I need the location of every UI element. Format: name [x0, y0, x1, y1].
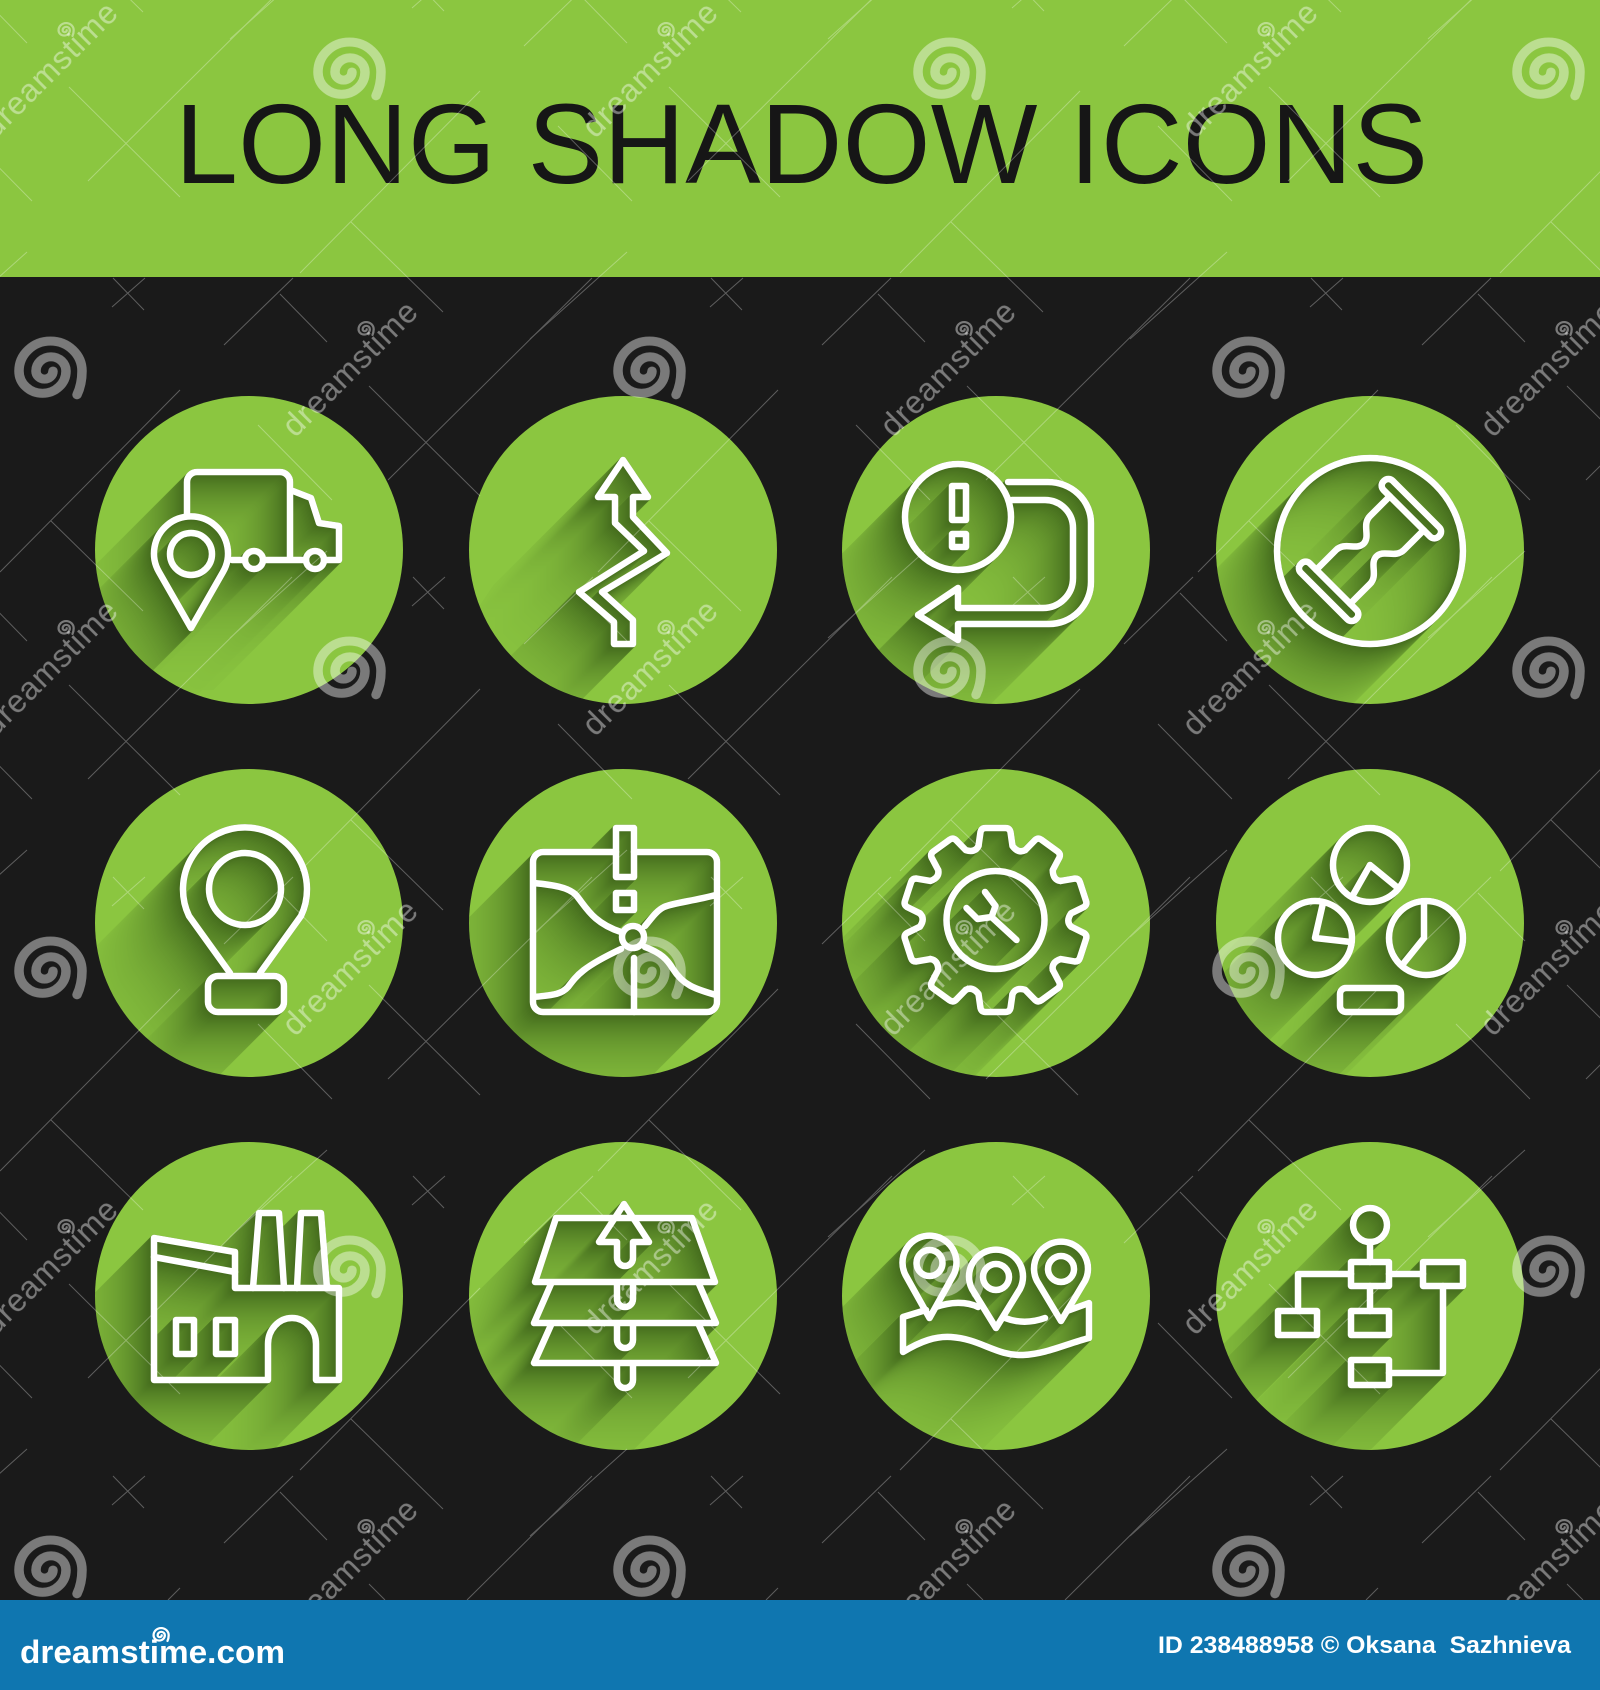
- footer logo text: dreamstime.com: [20, 1634, 285, 1670]
- panel: factory badge: [95, 1142, 403, 1450]
- badge circle: [95, 1142, 403, 1450]
- icon: truck with location pin: [154, 472, 339, 628]
- panel: warning return arrow badge: [842, 396, 1150, 704]
- badge circle: [469, 769, 777, 1077]
- badge circle: [95, 769, 403, 1077]
- long shadow: [154, 472, 339, 628]
- icon: stacked layers with arrow: [534, 1204, 716, 1388]
- icon: location pin on base: [183, 827, 307, 1012]
- panel: gear with wrench badge: [842, 769, 1150, 1077]
- icon: map with exclamation mark: [533, 828, 717, 1012]
- icon: three pins on wavy map: [902, 1236, 1089, 1355]
- text: dreamstime: [873, 1491, 1023, 1641]
- long shadow: [154, 1213, 339, 1380]
- badge circle: [1216, 396, 1524, 704]
- text: dreamstime: [1175, 1191, 1325, 1341]
- footer credit: ID 238488958 © Oksana Sazhnieva: [1158, 1632, 1572, 1659]
- long shadow: [579, 460, 667, 644]
- icon: winding road arrow: [579, 460, 667, 644]
- text: dreamstime: [575, 1191, 725, 1341]
- icon: gear with wrench: [899, 828, 1092, 1012]
- badge circle: [95, 396, 403, 704]
- long shadow: [899, 828, 1092, 1012]
- panel: layers badge: [469, 1142, 777, 1450]
- long shadow: [533, 828, 717, 1012]
- panel: pins on terrain badge: [842, 1142, 1150, 1450]
- text: dreamstime: [275, 293, 425, 443]
- text: dreamstime: [275, 892, 425, 1042]
- text: dreamstime: [1175, 592, 1325, 742]
- header band: [0, 0, 1600, 277]
- text: dreamstime: [873, 293, 1023, 443]
- icon: flowchart: [1278, 1208, 1463, 1385]
- panel: pie charts badge: [1216, 769, 1524, 1077]
- long shadow: [534, 1204, 716, 1388]
- badge circle: [842, 769, 1150, 1077]
- long shadow: [1278, 1208, 1463, 1385]
- text: dreamstime: [275, 1491, 425, 1641]
- icon: hourglass in circle: [1277, 458, 1463, 644]
- icon: exclamation with return arrow: [905, 464, 1091, 640]
- text: dreamstime: [575, 592, 725, 742]
- badge circle: [469, 1142, 777, 1450]
- badge circle: [842, 1142, 1150, 1450]
- panel: map warning badge: [469, 769, 777, 1077]
- badge circle: [1216, 1142, 1524, 1450]
- panel: pin on base badge: [95, 769, 403, 1077]
- panel: hourglass badge: [1216, 396, 1524, 704]
- panel: truck and pin badge: [95, 396, 403, 704]
- text: dreamstime: [873, 892, 1023, 1042]
- badge circle: [1216, 769, 1524, 1077]
- badge circle: [842, 396, 1150, 704]
- panel: flowchart badge: [1216, 1142, 1524, 1450]
- icon: three pie charts and bar: [1278, 828, 1463, 1012]
- long shadow: [1278, 828, 1463, 1012]
- title: LONG SHADOW ICONS: [175, 81, 1428, 207]
- icon: factory: [154, 1213, 339, 1380]
- long shadow: [183, 827, 307, 1012]
- badge circle: [469, 396, 777, 704]
- long shadow: [1277, 458, 1463, 644]
- panel: winding road arrow badge: [469, 396, 777, 704]
- long shadow: [905, 464, 1091, 640]
- footer bar: [0, 1600, 1600, 1690]
- long shadow: [902, 1236, 1089, 1355]
- footer logo mark: [154, 1628, 169, 1641]
